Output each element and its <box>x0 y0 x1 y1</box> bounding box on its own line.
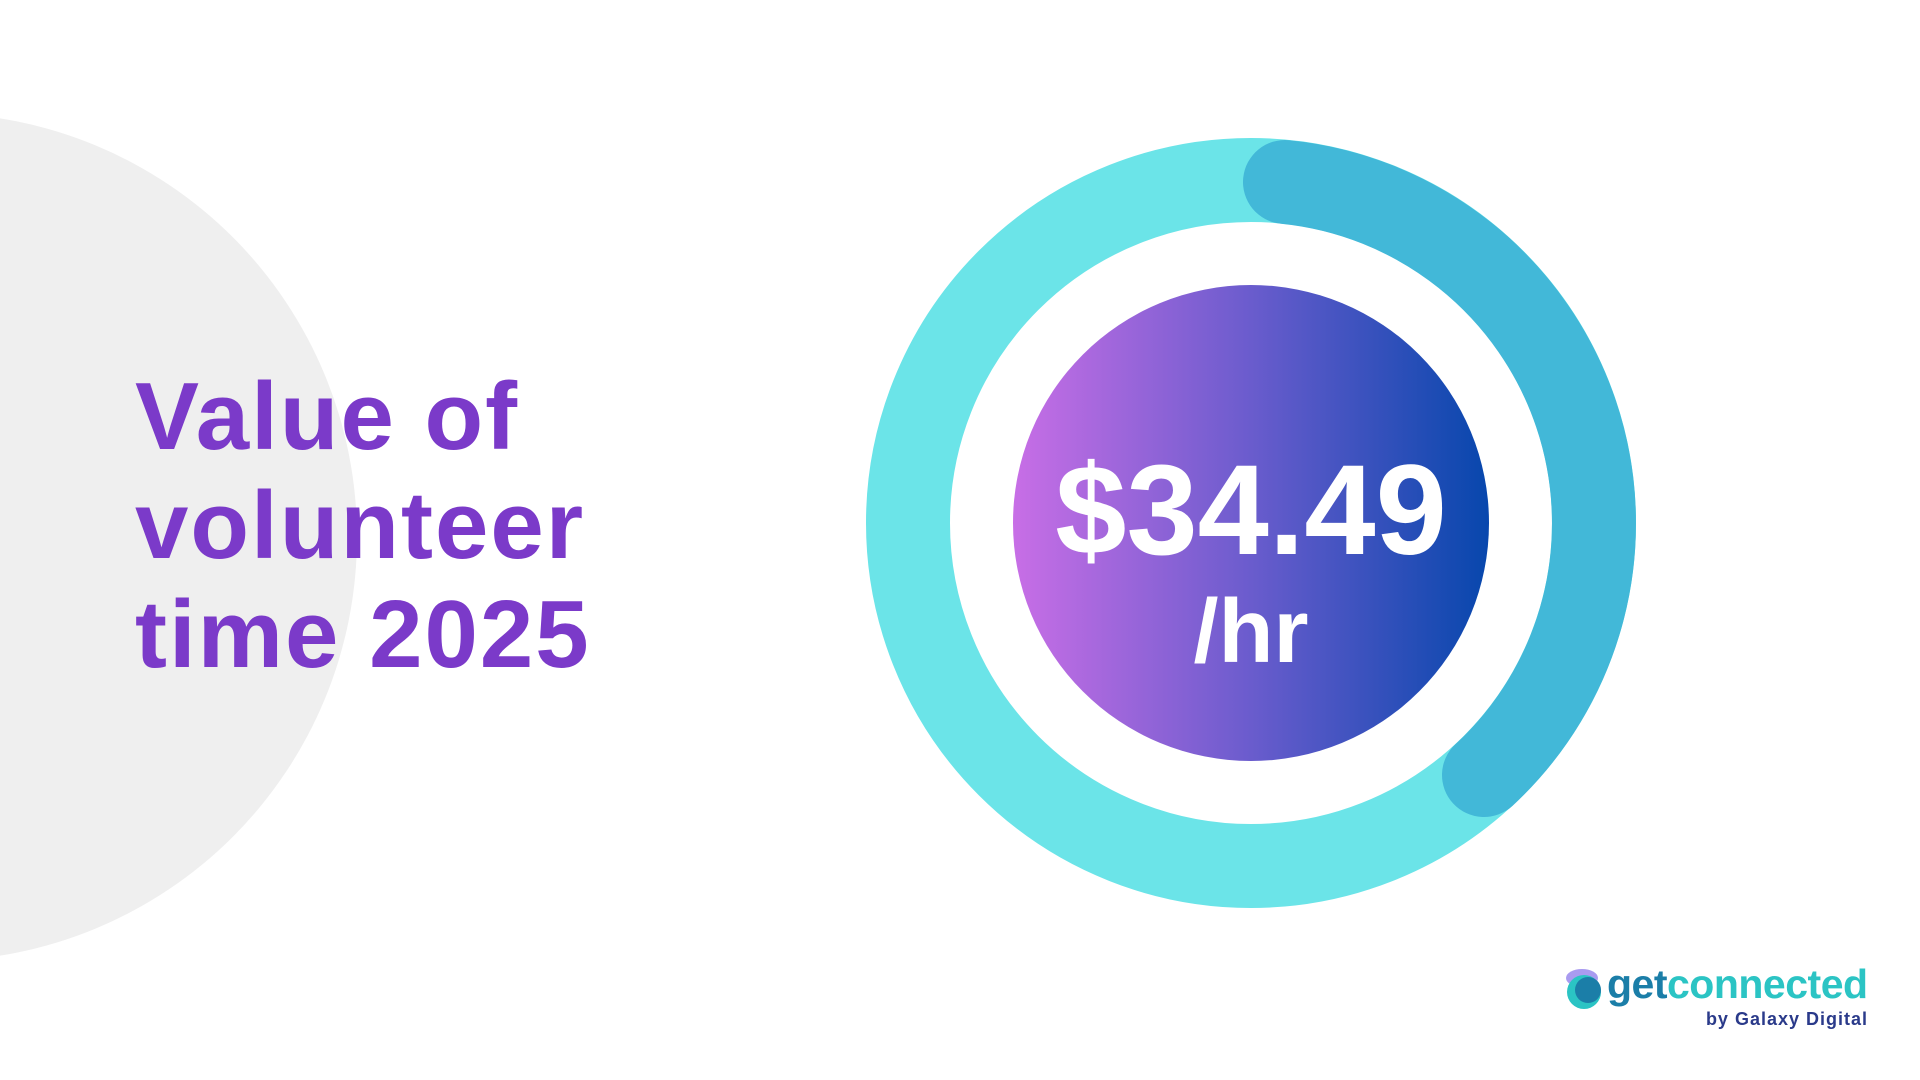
ring: track <box>908 180 1594 866</box>
title <box>135 363 591 688</box>
logo <box>1566 961 1868 1029</box>
icon: logo mark <box>1566 969 1601 1009</box>
wordmark: getconnected <box>1607 961 1868 1007</box>
center circle with value <box>1013 285 1489 761</box>
background grey circle <box>0 113 357 961</box>
title: time 2025 <box>135 581 591 688</box>
tagline: by Galaxy Digital <box>1706 1009 1868 1029</box>
center circle with value: /hr <box>1193 582 1309 682</box>
title: Value of <box>135 363 519 470</box>
center circle with value: $34.49 <box>1055 439 1447 582</box>
ring: value arc <box>1285 182 1594 775</box>
title: volunteer <box>135 472 585 579</box>
